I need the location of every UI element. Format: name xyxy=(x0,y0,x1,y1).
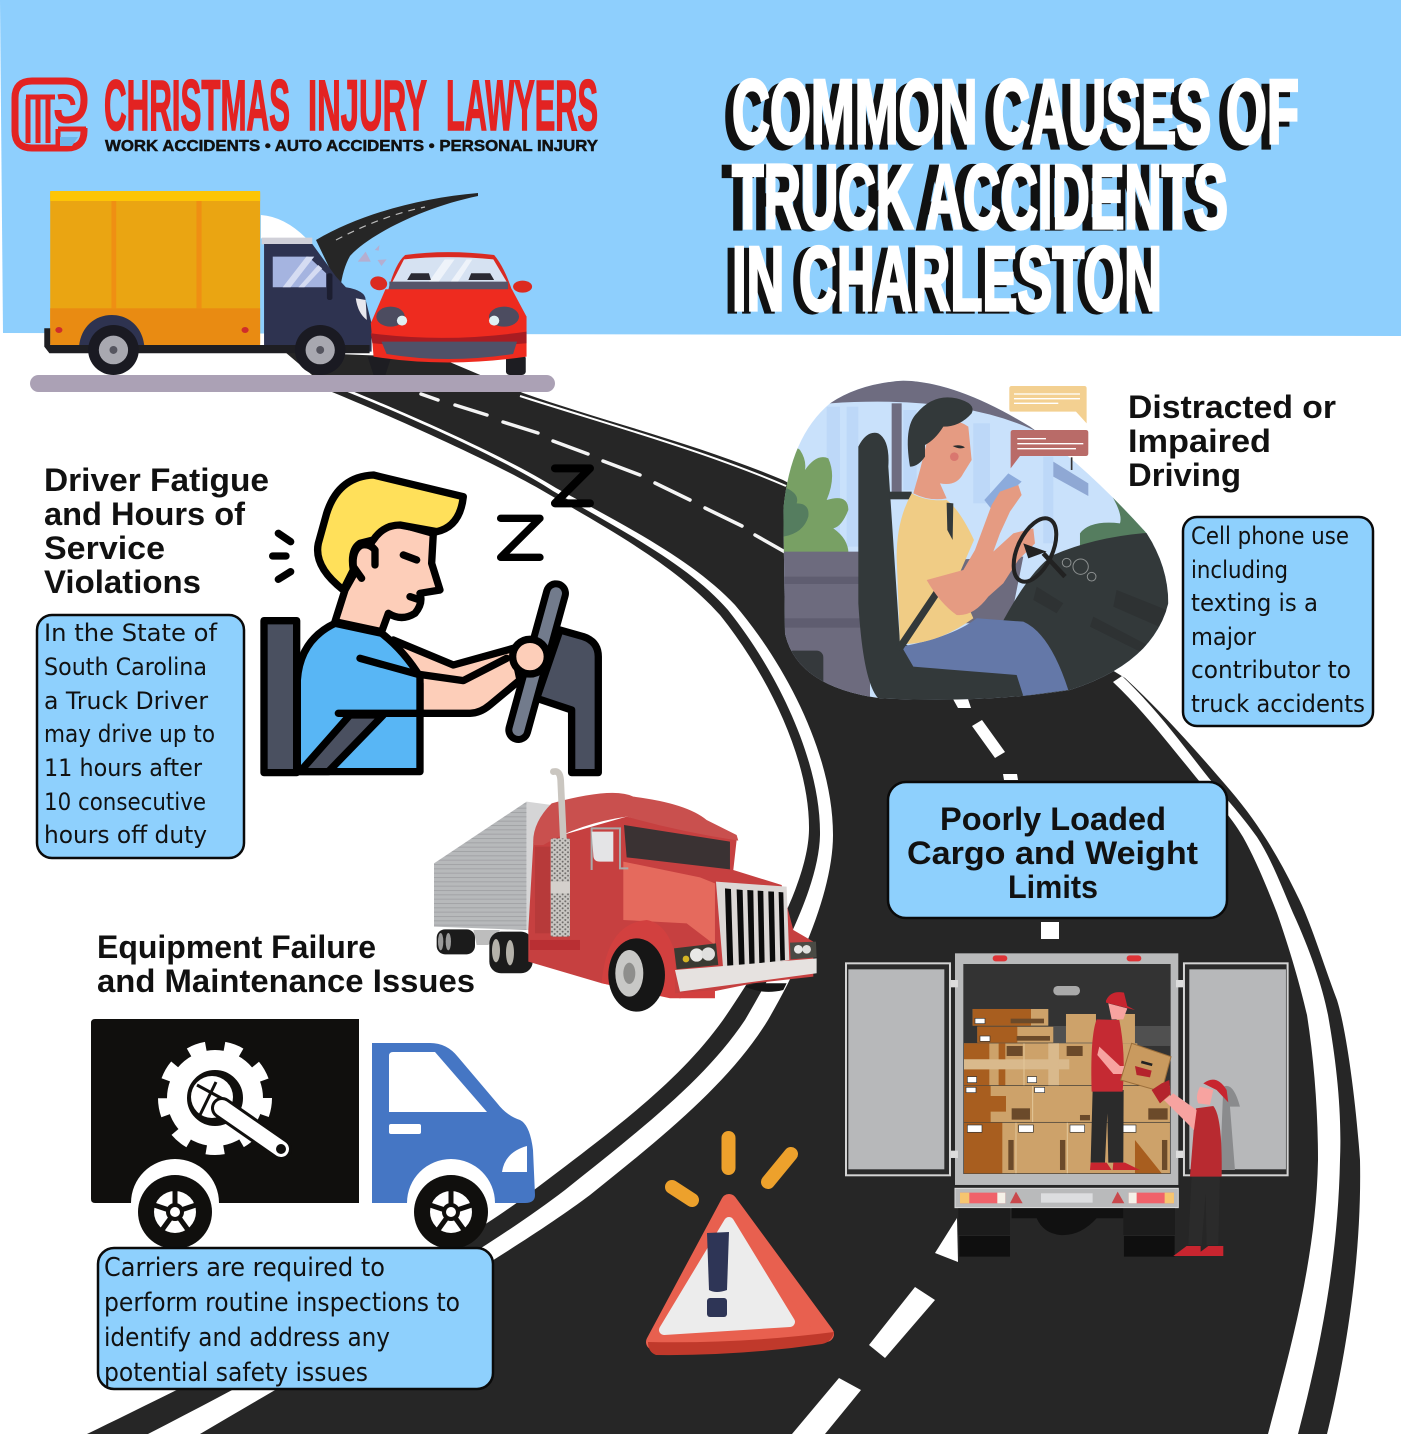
callout: driver hours text box: hours off duty xyxy=(44,821,207,849)
logo xyxy=(15,67,598,155)
icon: repair truck xyxy=(91,1019,535,1249)
worker on ground xyxy=(1152,1080,1228,1256)
warning sign xyxy=(648,1138,834,1355)
callout: cell phone text box: texting is a xyxy=(1191,589,1318,617)
orange truck xyxy=(44,191,372,375)
blue cab xyxy=(372,1043,535,1203)
logo wordmark: INJURY xyxy=(308,67,427,146)
panel: equipment failure heading: and Maintenance Issues xyxy=(97,963,475,999)
callout: carriers text box: perform routine inspections to xyxy=(104,1288,460,1318)
wheels xyxy=(138,1175,488,1249)
panel: distracted driving heading: Impaired xyxy=(1128,423,1271,459)
chat bubble: peach xyxy=(1009,386,1087,423)
rear-view mirror xyxy=(1053,457,1088,496)
callout: driver hours text box: may drive up to xyxy=(44,720,215,748)
callout: poorly loaded cargo heading: Poorly Loaded xyxy=(940,801,1166,837)
illustration: cargo truck being loaded xyxy=(846,953,1288,1257)
truck rear frame xyxy=(951,953,1183,1185)
callout: driver hours text box: a Truck Driver xyxy=(44,687,208,715)
panel: driver fatigue heading: Driver Fatigue xyxy=(44,462,269,498)
crash illustration xyxy=(44,191,532,375)
callout: cell phone text box xyxy=(1183,517,1373,726)
cab body xyxy=(528,793,813,998)
logo wordmark: CHRISTMAS xyxy=(104,67,290,146)
panel: equipment failure heading xyxy=(97,929,475,999)
chat bubble: red xyxy=(1011,430,1088,468)
callout: poorly loaded cargo heading xyxy=(888,782,1227,918)
callout: carriers text box: identify and address any xyxy=(104,1323,390,1353)
callout: carriers text box: Carriers are required to xyxy=(104,1253,385,1283)
callout: carriers text box xyxy=(98,1248,493,1389)
panel: distracted driving heading: Distracted or xyxy=(1128,389,1336,425)
grille xyxy=(674,882,817,992)
callout: driver hours text box: 11 hours after xyxy=(44,754,202,782)
callout: cell phone text box: truck accidents xyxy=(1191,690,1365,718)
left door xyxy=(846,963,950,1175)
logo tagline: WORK ACCIDENTS • AUTO ACCIDENTS • PERSONAL INJURY xyxy=(105,138,598,155)
red car xyxy=(358,245,532,375)
triangle xyxy=(654,1202,826,1342)
panel: equipment failure heading: Equipment Failure xyxy=(97,929,376,965)
panel: driver fatigue heading: and Hours of xyxy=(44,496,245,532)
exhaust stack xyxy=(551,771,570,937)
panel: driver fatigue heading xyxy=(44,462,269,600)
callout: driver hours text box: In the State of xyxy=(44,619,218,647)
red semi truck photo xyxy=(434,771,817,1012)
mirror xyxy=(592,828,628,870)
callout: cell phone text box: including xyxy=(1191,556,1288,584)
callout: driver hours text box xyxy=(37,615,244,858)
callout: cell phone text box: Cell phone use xyxy=(1191,522,1349,550)
illustration: driver on phone xyxy=(783,380,1168,700)
panel: distracted driving heading: Driving xyxy=(1128,457,1241,493)
ground bar xyxy=(30,375,555,392)
right door xyxy=(1184,963,1288,1175)
trailer xyxy=(434,802,552,945)
callout: cell phone text box: major xyxy=(1191,623,1256,651)
panel: distracted driving heading xyxy=(1128,389,1336,493)
panel: driver fatigue heading: Service xyxy=(44,530,165,566)
road xyxy=(87,352,1360,1434)
logo mark xyxy=(15,81,86,148)
bumper and tail lights xyxy=(955,1188,1178,1257)
callout: driver hours text box: 10 consecutive xyxy=(44,788,206,816)
title xyxy=(722,62,1299,332)
cabin scene xyxy=(783,380,1168,700)
callout: poorly loaded cargo heading: Limits xyxy=(1008,869,1098,905)
cargo boxes xyxy=(964,1009,1170,1173)
alert rays xyxy=(672,1138,791,1200)
callout: carriers text box: potential safety issues xyxy=(104,1358,368,1388)
gear and wrench xyxy=(165,1048,286,1154)
callout: poorly loaded cargo heading: Cargo and Weight xyxy=(907,835,1198,871)
worker on truck xyxy=(1090,992,1171,1170)
callout: cell phone text box: contributor to xyxy=(1191,656,1351,684)
callout: driver hours text box: South Carolina xyxy=(44,653,207,681)
front wheel xyxy=(608,938,665,1012)
cargo box xyxy=(91,1019,359,1203)
tires xyxy=(437,929,533,973)
distant road in header xyxy=(316,193,478,290)
header band xyxy=(0,0,1401,336)
panel: driver fatigue heading: Violations xyxy=(44,564,201,600)
icon: sleeping driver xyxy=(264,468,598,773)
text: LAWYERS xyxy=(446,67,598,146)
